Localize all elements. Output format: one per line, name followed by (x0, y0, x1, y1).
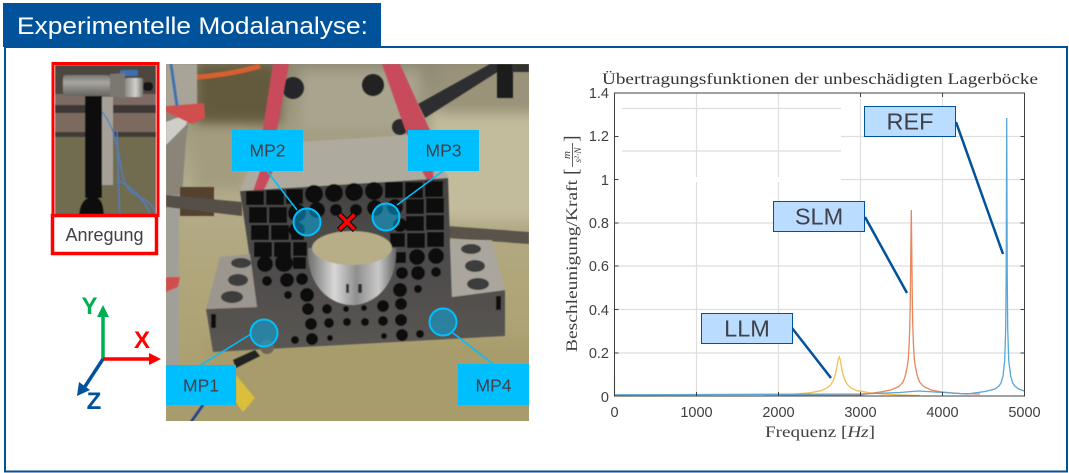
callout: REF (864, 106, 1003, 254)
callout: REF: REF (886, 108, 934, 134)
round holes (211, 182, 501, 345)
y axis tick labels: 1.4 (589, 86, 609, 102)
y axis label (561, 135, 584, 352)
central bore (308, 231, 396, 305)
sensor cable and tag (191, 340, 274, 422)
label: Anregung: Anregung (65, 225, 144, 245)
callout: LLM: LLM (724, 316, 770, 342)
measuring point MP3 marker and label: MP3 (426, 140, 461, 160)
curve: LLM (614, 357, 920, 396)
grid lines (614, 93, 1024, 396)
y axis tick labels: 1 (601, 173, 609, 189)
y axis tick labels (589, 86, 609, 406)
x axis tick labels: 4000 (926, 405, 959, 421)
block top face (240, 135, 448, 191)
arrow: Z axis: Z (87, 388, 101, 415)
y axis tick labels: 0.6 (589, 259, 609, 275)
x axis label: Frequenz [ Hz ] (765, 424, 875, 441)
photo background floor and lab equipment (166, 62, 540, 430)
arrow: Y axis: Y (81, 293, 98, 320)
header: Experimentelle Modalanalyse: Experimentelle Modalanalyse: (17, 13, 368, 40)
x axis tick labels: 2000 (762, 405, 795, 421)
y axis tick labels: 0 (601, 390, 609, 406)
callout: SLM (774, 202, 907, 293)
right mounting foot (450, 240, 505, 297)
measuring point MP1 marker and label: MP1 (183, 376, 219, 396)
coordinate axes icon (77, 293, 161, 415)
x axis tick labels: 5000 (1008, 405, 1041, 421)
curve: REF (614, 118, 1024, 395)
y axis tick labels: 0.8 (589, 216, 609, 232)
measuring point MP3 marker and label (372, 130, 479, 230)
measuring point MP2 marker and label: MP2 (250, 140, 285, 160)
callout: LLM (702, 314, 831, 378)
y axis label: Beschleunigung/Kraft (564, 179, 581, 352)
callout: SLM: SLM (795, 204, 843, 230)
y axis tick labels: 0.4 (589, 303, 609, 319)
red rubber straps (262, 64, 432, 135)
block front face (206, 178, 505, 352)
x axis tick labels: 0 (610, 405, 619, 421)
square pockets (246, 181, 444, 263)
chart title: Übertragungsfunktionen der unbeschädigten Lagerböcke (602, 71, 1038, 88)
y axis label: s²·N (574, 147, 584, 163)
arrow: X axis: X (134, 327, 150, 354)
y axis tick labels: 1.2 (589, 129, 609, 145)
x axis tick labels: 3000 (844, 405, 877, 421)
y axis tick labels: 0.2 (589, 346, 609, 362)
measuring point MP2 marker and label (232, 130, 320, 236)
excitation photo frame (53, 64, 158, 216)
header: Experimentelle Modalanalyse (3, 3, 381, 47)
icon: red excitation point cross (339, 214, 355, 230)
label: Anregung (52, 216, 156, 254)
excitation photo with sensor on stand (55, 65, 156, 215)
left mounting foot (206, 254, 257, 309)
x axis tick labels: 1000 (680, 405, 713, 421)
photo: bearing block test specimen (166, 62, 540, 430)
measuring point MP4 marker and label: MP4 (476, 376, 512, 396)
line chart: transfer functions (589, 86, 1041, 421)
x axis tick labels (610, 405, 1041, 421)
y axis label: m (561, 151, 573, 159)
curve: SLM (780, 210, 980, 395)
measuring point MP1 marker and label (166, 320, 278, 405)
plot frame and ticks (614, 93, 1024, 396)
y axis label: [ (561, 168, 583, 175)
y axis label: ] (561, 135, 583, 142)
measuring point MP4 marker and label (430, 308, 529, 405)
